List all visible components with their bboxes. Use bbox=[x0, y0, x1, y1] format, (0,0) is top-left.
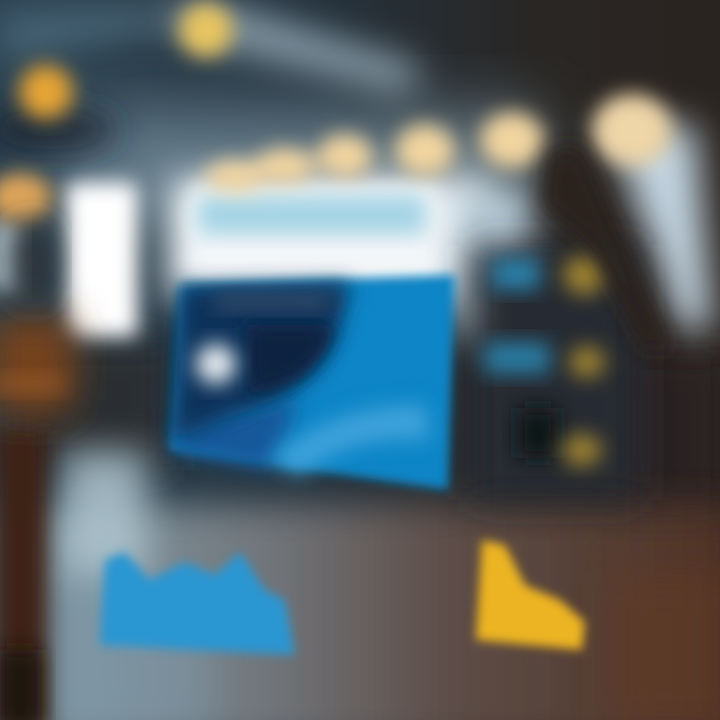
white dot bbox=[196, 344, 236, 384]
grey text band bbox=[215, 292, 330, 310]
lower left shaded area bbox=[175, 400, 300, 470]
lamp: top centre bbox=[179, 3, 233, 57]
lamp: far left bbox=[0, 173, 52, 223]
lamp: left bbox=[19, 65, 73, 119]
blue block upper bbox=[492, 258, 540, 290]
right dark display board bbox=[470, 245, 640, 500]
blue block middle bbox=[484, 342, 550, 374]
dark inner band bbox=[245, 325, 335, 395]
blue area chart on floor bbox=[100, 552, 295, 655]
pale chart swirl bbox=[270, 405, 430, 475]
white backdrop panel bbox=[168, 178, 530, 340]
right window glow bbox=[610, 125, 712, 330]
light blue heading bar bbox=[198, 195, 426, 235]
dark block lower bbox=[518, 408, 558, 458]
blue card bbox=[170, 275, 455, 490]
silhouette: figure at right bbox=[540, 145, 672, 350]
yellow area chart on floor bbox=[476, 540, 585, 650]
yellow marks bbox=[562, 255, 607, 466]
left edge glow bbox=[0, 220, 20, 290]
silhouette: wooden post at left bbox=[0, 220, 75, 720]
left window glow bbox=[66, 182, 138, 337]
string of bokeh lights bbox=[205, 94, 672, 192]
floor bbox=[0, 450, 720, 720]
ceiling beams bbox=[0, 5, 420, 150]
navy panel bbox=[172, 282, 350, 440]
